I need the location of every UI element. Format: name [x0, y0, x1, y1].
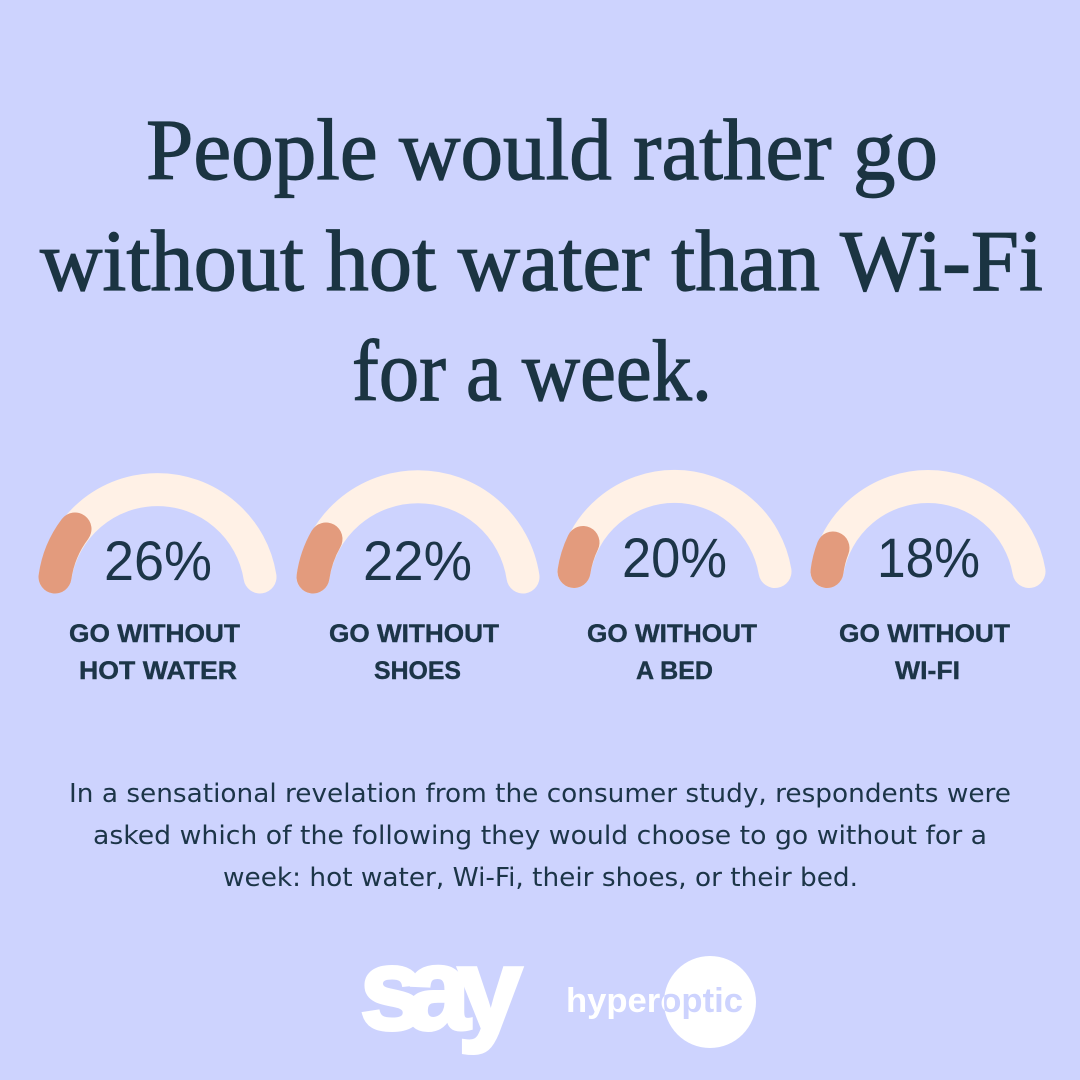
gauge: bed 20%: 20% — [622, 526, 727, 589]
gauge: Wi-Fi 18%: WI-FI — [895, 657, 960, 685]
logo: hyperoptic: hyperoptic — [566, 982, 743, 1020]
gauge: bed 20% — [574, 486, 775, 685]
body text: In a sensational revelation from the consumer study, respondents were — [69, 779, 1011, 809]
title: without hot water than Wi-Fi — [40, 212, 1043, 309]
gauge: hot water 26% — [55, 490, 260, 685]
gauge: Wi-Fi 18% — [827, 486, 1029, 685]
title — [40, 101, 1043, 419]
gauge: shoes 22%: 22% — [363, 529, 472, 592]
gauge: shoes 22%: SHOES — [374, 657, 461, 685]
logo: hyperoptic: hyperoptic — [566, 982, 743, 1020]
gauge: hot water 26%: 26% — [104, 529, 212, 592]
title: People would rather go — [146, 101, 938, 198]
body text: asked which of the following they would choose to go without for a — [93, 821, 987, 851]
gauge: bed 20%: GO WITHOUT — [587, 620, 757, 648]
gauge: shoes 22% — [313, 487, 523, 685]
body text — [69, 779, 1011, 893]
gauge: bed 20%: A BED — [636, 657, 713, 685]
body text: week: hot water, Wi-Fi, their shoes, or their bed. — [223, 863, 858, 893]
logo: hyperoptic — [566, 956, 756, 1048]
gauge: Wi-Fi 18%: 18% — [877, 526, 980, 589]
gauge: Wi-Fi 18%: GO WITHOUT — [839, 620, 1010, 648]
gauge: hot water 26%: HOT WATER — [79, 657, 237, 685]
title: for a week. — [352, 322, 712, 419]
gauge: hot water 26%: GO WITHOUT — [69, 620, 240, 648]
logo: say: say — [360, 926, 522, 1054]
gauge: shoes 22%: GO WITHOUT — [329, 620, 499, 648]
